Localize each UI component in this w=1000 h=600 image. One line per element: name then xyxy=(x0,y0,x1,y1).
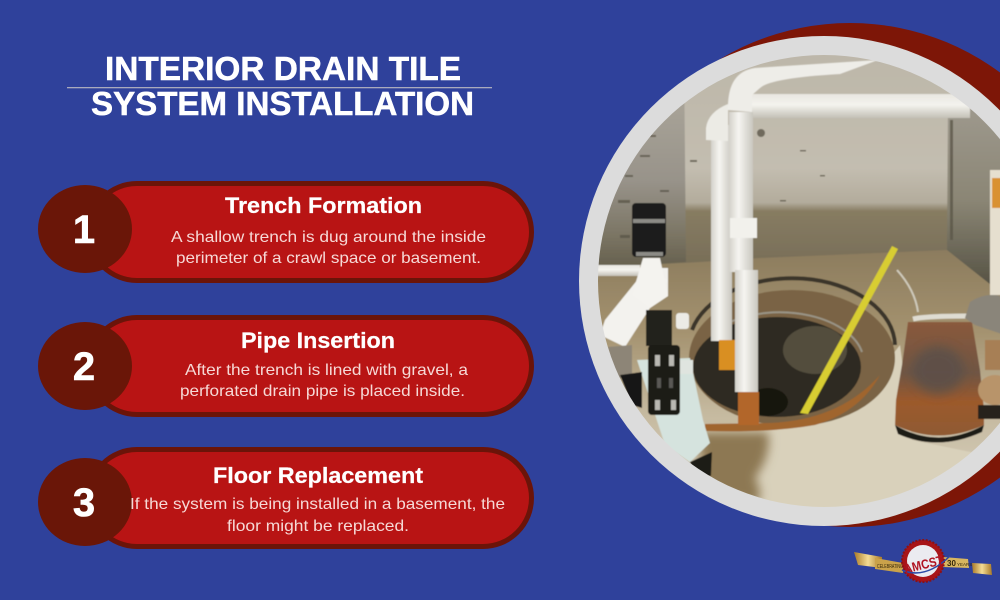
number badge 2 xyxy=(38,322,132,410)
description: step 2 xyxy=(180,362,468,400)
left wall xyxy=(598,104,686,264)
front pipe elbow and run xyxy=(728,60,878,425)
description: step 1 xyxy=(171,229,486,267)
rim bottom edge xyxy=(705,375,880,431)
white elbow pipe xyxy=(602,282,650,346)
float ball xyxy=(978,375,1000,405)
description: step 3 xyxy=(130,496,505,535)
black strainer xyxy=(648,345,680,415)
white left pipe stub xyxy=(590,265,640,276)
pale floor below pit xyxy=(707,345,971,473)
description: step 3: If the system is being installed in a basement, the xyxy=(130,496,505,513)
left pump white body xyxy=(637,358,710,462)
wall marks xyxy=(618,120,953,240)
white seal centre xyxy=(907,545,939,577)
switch parts xyxy=(646,310,672,346)
gray pump shaft xyxy=(608,345,632,378)
number badge 3: 3 xyxy=(73,481,95,525)
panel: step 2 pipe insertion xyxy=(38,318,532,414)
heading: trench formation: Trench Formation xyxy=(225,193,422,218)
right side wall xyxy=(947,108,1000,284)
description: step 1: A shallow trench is dug around the inside xyxy=(171,229,486,246)
back wall xyxy=(640,55,951,266)
white branch pipe xyxy=(662,267,669,297)
float wire xyxy=(897,270,918,312)
logo: 30 years ribbon badge xyxy=(854,540,992,582)
number badge 1 xyxy=(38,185,132,273)
gold ribbon left: CELEBRATING xyxy=(877,564,903,570)
panel: step 3 floor replacement xyxy=(38,450,532,546)
concrete floor xyxy=(598,250,1000,464)
title xyxy=(67,50,492,122)
number badge 3 xyxy=(38,458,132,546)
top horizontal pipe xyxy=(750,94,970,118)
description: step 2: perforated drain pipe is placed inside. xyxy=(180,383,465,400)
title: SYSTEM INSTALLATION xyxy=(91,85,474,122)
description: step 2: After the trench is lined with gravel, a xyxy=(185,362,468,379)
rim dark edge xyxy=(692,278,895,345)
gold ribbon right: 30 xyxy=(947,559,956,568)
title: INTERIOR DRAIN TILE xyxy=(105,50,461,87)
yellow measuring stick xyxy=(800,246,898,414)
rusted pump xyxy=(895,322,984,443)
red serrated seal xyxy=(902,540,944,582)
maroon backing circle xyxy=(598,23,1000,527)
gold ribbon right xyxy=(943,557,992,575)
pit interior xyxy=(693,317,861,417)
white cone xyxy=(632,258,668,308)
description: step 1: perimeter of a crawl space or basement. xyxy=(176,250,481,267)
dark base xyxy=(690,452,712,476)
description: step 3: floor might be replaced. xyxy=(227,518,409,535)
brand text: AMCST xyxy=(902,552,945,577)
pit rim xyxy=(689,290,895,426)
back vertical pipe xyxy=(706,104,736,370)
heading: pipe insertion: Pipe Insertion xyxy=(241,328,395,353)
right gray fitting xyxy=(965,295,1000,335)
gold ribbon right: YEARS xyxy=(957,562,972,567)
floor stain xyxy=(700,432,769,505)
number badge 1: 1 xyxy=(73,208,95,252)
inner rim arc xyxy=(730,312,862,352)
black coupler xyxy=(632,203,666,257)
panel: step 1 trench formation xyxy=(38,184,532,280)
photo: sump pit in basement xyxy=(590,50,1000,520)
right standing pipe xyxy=(990,170,1000,295)
pump outlet pipe xyxy=(913,316,972,319)
number badge 2: 2 xyxy=(73,345,95,389)
heading: floor replacement: Floor Replacement xyxy=(213,463,424,488)
blue swoosh xyxy=(902,556,950,573)
photo ring xyxy=(579,36,1000,526)
